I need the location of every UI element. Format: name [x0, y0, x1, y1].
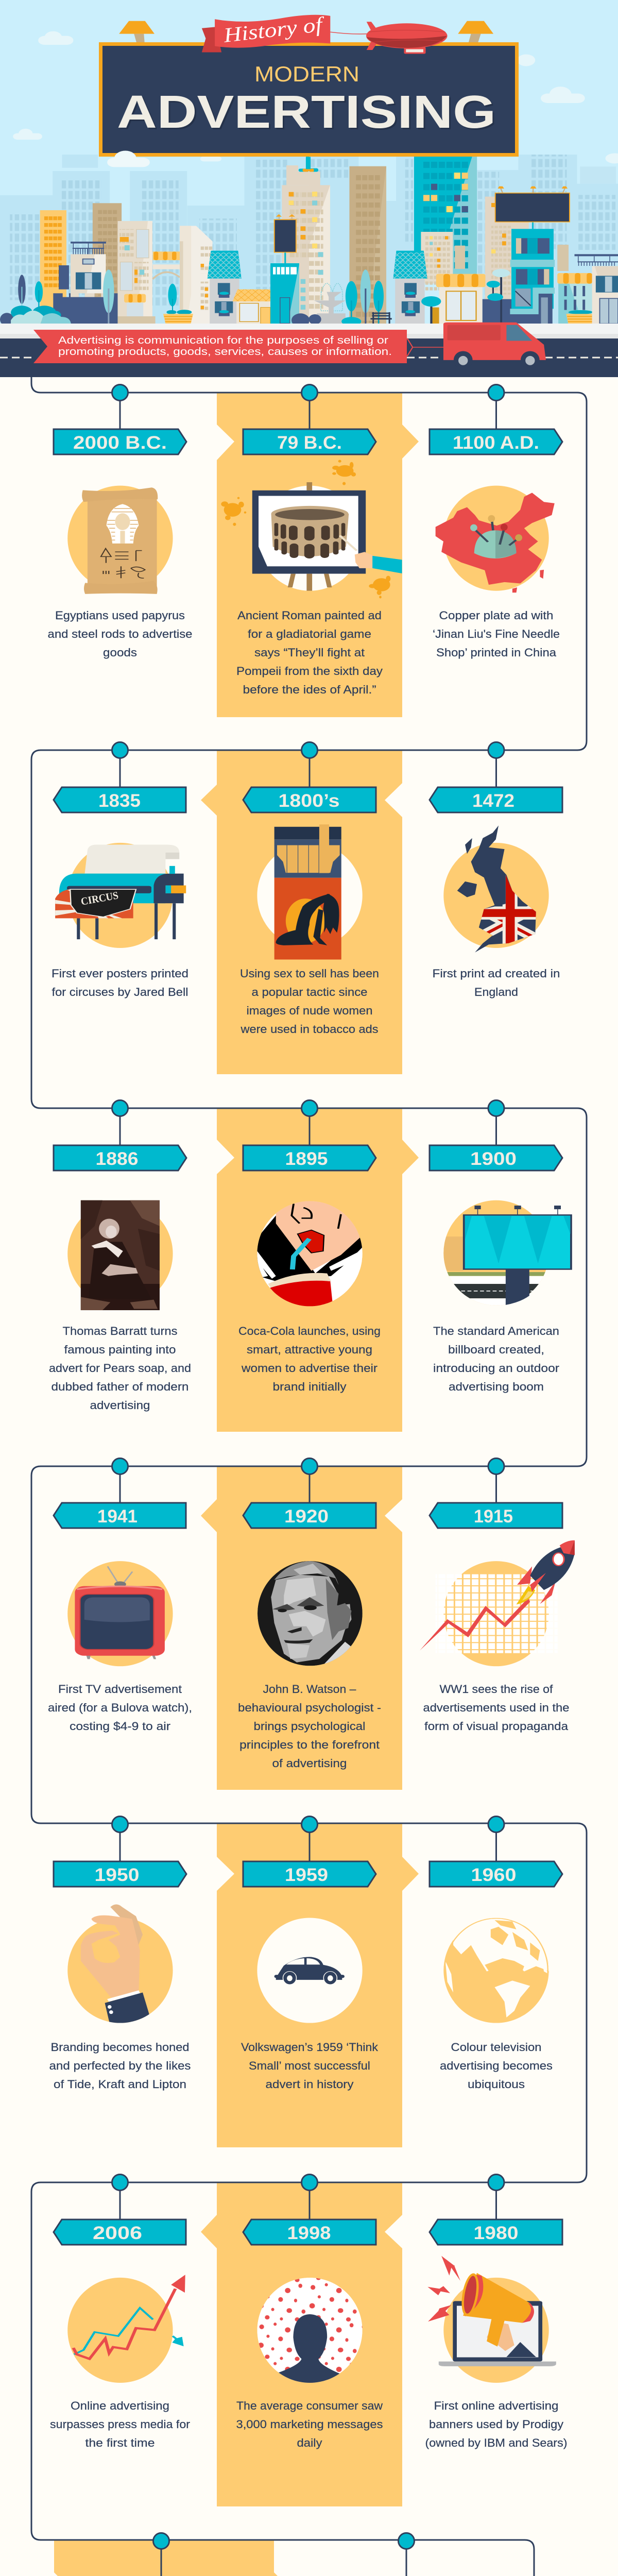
description: John B. Watson –: [263, 1683, 356, 1696]
street and road: [0, 324, 618, 377]
description: says “They’ll fight at: [254, 646, 365, 659]
icon: crossing line chart: [67, 2275, 185, 2383]
airship: [330, 22, 448, 54]
date tag: 1835: [98, 791, 141, 811]
description: women to advertise their: [241, 1362, 377, 1375]
history of ribbon: [202, 12, 330, 52]
description: daily: [297, 2436, 322, 2449]
icon: cigarette pack: [257, 824, 363, 959]
date tag: 79 B.C.: [277, 433, 342, 453]
description: advertisements used in the: [423, 1701, 570, 1714]
description: advertising becomes: [440, 2059, 553, 2072]
description: the first time: [85, 2436, 154, 2449]
date tag: 1980: [474, 2223, 518, 2243]
icon: roadside billboard: [443, 1200, 571, 1306]
description: of Tide, Kraft and Lipton: [54, 2078, 186, 2091]
icon: woman drinking cola: [256, 1200, 363, 1308]
date tag: [54, 429, 186, 454]
description: England: [474, 986, 518, 998]
title billboard: [101, 12, 517, 169]
skyline left half: [0, 155, 310, 327]
date tag: [243, 1503, 376, 1528]
date tag: 1800’s: [278, 791, 340, 811]
description: First online advertising: [434, 2399, 558, 2412]
description: Pompeii from the sixth day: [236, 665, 383, 677]
description: 3,000 marketing messages: [236, 2418, 383, 2431]
event: 2000 B.C.: [47, 429, 193, 659]
description: and perfected by the likes: [49, 2059, 191, 2072]
icon: Pears painting: [67, 1200, 173, 1310]
event: 1998: [236, 2219, 383, 2449]
description: [433, 967, 560, 998]
description: goods: [103, 646, 137, 659]
event: 1941: [48, 1503, 192, 1733]
billboard support: [306, 157, 311, 169]
description: costing $4-9 to air: [70, 1720, 170, 1733]
event: 1472: [430, 787, 562, 998]
date tag: 1920: [284, 1506, 329, 1527]
description: The average consumer saw: [236, 2399, 383, 2412]
date tag: [54, 787, 186, 812]
date tag: [243, 787, 376, 812]
event: 1900: [430, 1145, 571, 1393]
billboard panel: [101, 44, 517, 155]
date tag: [430, 1145, 562, 1171]
description: famous painting into: [64, 1343, 176, 1356]
description: [238, 1325, 381, 1393]
date tag: [430, 429, 562, 454]
icon: Volkswagen beetle: [257, 1918, 363, 2023]
date tag: 1100 A.D.: [453, 433, 539, 453]
title: modern: MODERN: [254, 62, 359, 86]
description: [423, 1683, 570, 1733]
description: principles to the forefront: [239, 1738, 380, 1751]
intro text: promoting products, goods, services, causes or information.: [58, 346, 392, 358]
description: behavioural psychologist -: [238, 1701, 381, 1714]
description: banners used by Prodigy: [429, 2418, 563, 2431]
description: smart, attractive young: [247, 1343, 372, 1356]
icon: UK map with flag: [443, 825, 549, 953]
cloud over billboard edge: [107, 150, 150, 167]
event: 1100 A.D.: [430, 429, 562, 659]
date tag: 1960: [471, 1865, 516, 1885]
description: First TV advertisement: [58, 1683, 182, 1696]
description: [240, 967, 379, 1036]
event: 2006: [50, 2219, 190, 2449]
date tag: 1900: [470, 1149, 517, 1169]
description: [49, 2041, 191, 2091]
description: The standard American: [433, 1325, 559, 1337]
description: ubiquitous: [468, 2078, 525, 2091]
description: Using sex to sell has been: [240, 967, 379, 980]
icon: papyrus scroll: [67, 486, 173, 594]
description: images of nude women: [246, 1004, 373, 1017]
icon: China map with pincushion: [436, 486, 555, 592]
date tag: [430, 1503, 562, 1528]
icon: television: [67, 1561, 173, 1666]
description: [52, 967, 188, 998]
event: 1895: [238, 1145, 381, 1393]
date tag: [430, 787, 562, 812]
date tag: 1959: [285, 1865, 328, 1885]
icon: portrait of John B. Watson: [258, 1561, 363, 1666]
date tag: [430, 2219, 562, 2245]
description: brings psychological: [253, 1720, 366, 1733]
description: Ancient Roman painted ad: [237, 609, 382, 622]
description: [236, 609, 383, 696]
description: surpasses press media for: [50, 2418, 190, 2431]
billboard lamps: [119, 21, 493, 44]
event: 1950: [49, 1861, 191, 2091]
date tag: 2006: [93, 2223, 142, 2243]
description: for a gladiatorial game: [248, 628, 371, 640]
icon: OK hand gesture: [67, 1904, 173, 2027]
date tag: 1998: [287, 2223, 331, 2243]
description: Small’ most successful: [249, 2059, 370, 2072]
intro text: [58, 335, 392, 358]
date tag: [243, 429, 376, 454]
description: Colour television: [451, 2041, 542, 2054]
icon: painted colosseum: [221, 460, 402, 599]
date tag: [54, 1145, 186, 1171]
description: Egyptians used papyrus: [55, 609, 185, 622]
description: [48, 1683, 192, 1733]
event: 1980: [425, 2219, 568, 2449]
description: form of visual propaganda: [424, 1720, 569, 1733]
description: [425, 2399, 568, 2449]
description: [433, 609, 560, 659]
description: advert in history: [266, 2078, 353, 2091]
skyline right half: [308, 155, 618, 326]
icon: silhouette surrounded by messages: [257, 2278, 363, 2385]
title: advertising: ADVERTISING: [118, 88, 497, 140]
delivery van: [407, 323, 546, 369]
intro text: Advertising is communication for the purposes of selling or: [58, 335, 388, 346]
clouds: [13, 31, 618, 163]
description: [440, 2041, 553, 2091]
description: [47, 609, 193, 659]
icon: poster printer: [55, 843, 186, 948]
intro banner: [33, 330, 407, 363]
description: Shop’ printed in China: [436, 646, 557, 659]
description: Branding becomes honed: [50, 2041, 190, 2054]
event: 1920: [238, 1503, 381, 1770]
date tag: [243, 2219, 376, 2245]
description: Volkswagen’s 1959 ‘Think: [241, 2041, 379, 2054]
date tag: [243, 1861, 376, 1887]
description: billboard created,: [448, 1343, 544, 1356]
date tag: [54, 1503, 186, 1528]
description: [433, 1325, 559, 1393]
date tag: 1895: [285, 1149, 328, 1169]
description: were used in tobacco ads: [240, 1023, 378, 1036]
description: a popular tactic since: [251, 986, 368, 998]
event: 1915: [420, 1503, 575, 1733]
description: advertising boom: [449, 1380, 544, 1393]
description: Copper plate ad with: [439, 609, 553, 622]
description: [238, 1683, 381, 1770]
date tag: [243, 1145, 376, 1171]
description: dubbed father of modern: [52, 1380, 188, 1393]
description: before the ides of April.”: [243, 683, 376, 696]
icon: globe: [443, 1918, 550, 2023]
description: Coca-Cola launches, using: [238, 1325, 381, 1337]
description: [236, 2399, 383, 2449]
yellow highlight columns: [54, 393, 419, 2576]
date tag: [54, 1861, 186, 1887]
description: [50, 2399, 190, 2449]
event: 79 B.C.: [221, 429, 402, 696]
date tag: [54, 2219, 186, 2245]
date tag: 1472: [472, 791, 514, 811]
description: of advertising: [272, 1757, 347, 1770]
icon: poster printer: CIRCUS: [80, 890, 119, 908]
event: 1886: [49, 1145, 191, 1412]
description: First ever posters printed: [52, 967, 188, 980]
description: aired (for a Bulova watch),: [48, 1701, 192, 1714]
description: brand initially: [273, 1380, 346, 1393]
timeline nodes: [112, 384, 504, 2549]
description: ‘Jinan Liu's Fine Needle: [433, 628, 560, 640]
description: introducing an outdoor: [433, 1362, 559, 1375]
description: [241, 2041, 379, 2091]
date tag: 1950: [95, 1865, 139, 1885]
icon: rocket over rising chart: [420, 1540, 575, 1666]
timeline connector line: [31, 377, 587, 2576]
date tag: 2000 B.C.: [73, 433, 167, 453]
event: 1835: [52, 787, 188, 998]
date tag: 1941: [97, 1506, 138, 1527]
description: First print ad created in: [433, 967, 560, 980]
description: [49, 1325, 191, 1412]
event: 1960: [430, 1861, 562, 2091]
description: advert for Pears soap, and: [49, 1362, 191, 1375]
description: Thomas Barratt turns: [63, 1325, 177, 1337]
event: 1959: [241, 1861, 379, 2091]
date tag: 1886: [96, 1149, 138, 1169]
header: skyline scene: [0, 0, 618, 377]
description: (owned by IBM and Sears): [425, 2436, 568, 2449]
description: WW1 sees the rise of: [440, 1683, 553, 1696]
description: Online advertising: [71, 2399, 169, 2412]
history of ribbon: History of: [222, 12, 327, 47]
description: advertising: [90, 1399, 150, 1412]
date tag: 1915: [474, 1506, 513, 1527]
icon: megaphone from laptop: [427, 2256, 556, 2383]
title: advertising: ADVERTISING: [117, 87, 496, 138]
event: 1800's: [240, 787, 379, 1036]
date tag: [430, 1861, 562, 1887]
description: for circuses by Jared Bell: [52, 986, 188, 998]
description: and steel rods to advertise: [47, 628, 193, 640]
